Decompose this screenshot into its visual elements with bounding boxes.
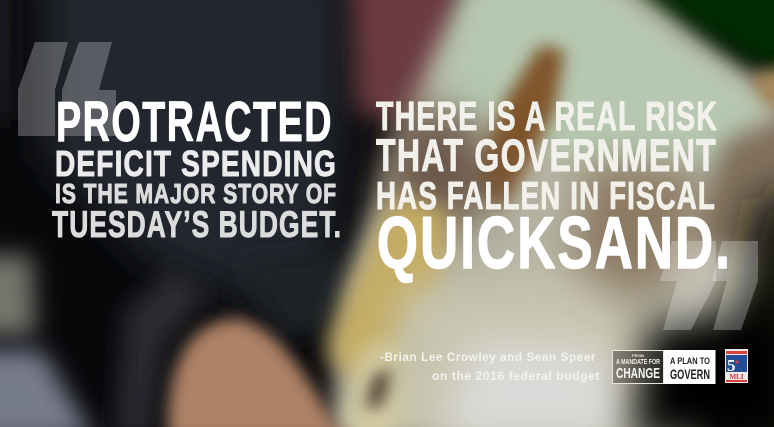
attribution: -Brian Lee Crowley and Sean Speer <box>380 352 596 364</box>
attribution: on the 2016 federal budget <box>432 371 600 383</box>
logo: a mandate for change, a plan to govern: GOVERN <box>670 366 710 382</box>
logo: a mandate for change, a plan to govern: A PLAN TO <box>670 356 710 366</box>
opening quotation mark <box>18 42 116 136</box>
logo: MLI fifth anniversary <box>725 349 748 383</box>
left quote text: TUESDAY’S BUDGET. <box>52 204 342 245</box>
logo: a mandate for change, a plan to govern: FROM <box>632 353 645 358</box>
logo: a mandate for change, a plan to govern: CHANGE <box>616 366 660 382</box>
attribution <box>380 352 600 383</box>
logo: MLI fifth anniversary: MLI <box>730 373 744 381</box>
left quote text <box>52 90 342 245</box>
closing quotation mark <box>660 241 758 330</box>
logo: MLI fifth anniversary: 5 <box>727 356 736 375</box>
left quote text: PROTRACTED <box>56 90 333 154</box>
logo: a mandate for change, a plan to govern <box>612 350 716 384</box>
right quote text <box>376 93 732 284</box>
left quote text: IS THE MAJOR STORY OF <box>55 178 337 209</box>
left quote text: DEFICIT SPENDING <box>55 143 337 184</box>
logo: a mandate for change, a plan to govern: A MANDATE FOR <box>616 357 660 366</box>
